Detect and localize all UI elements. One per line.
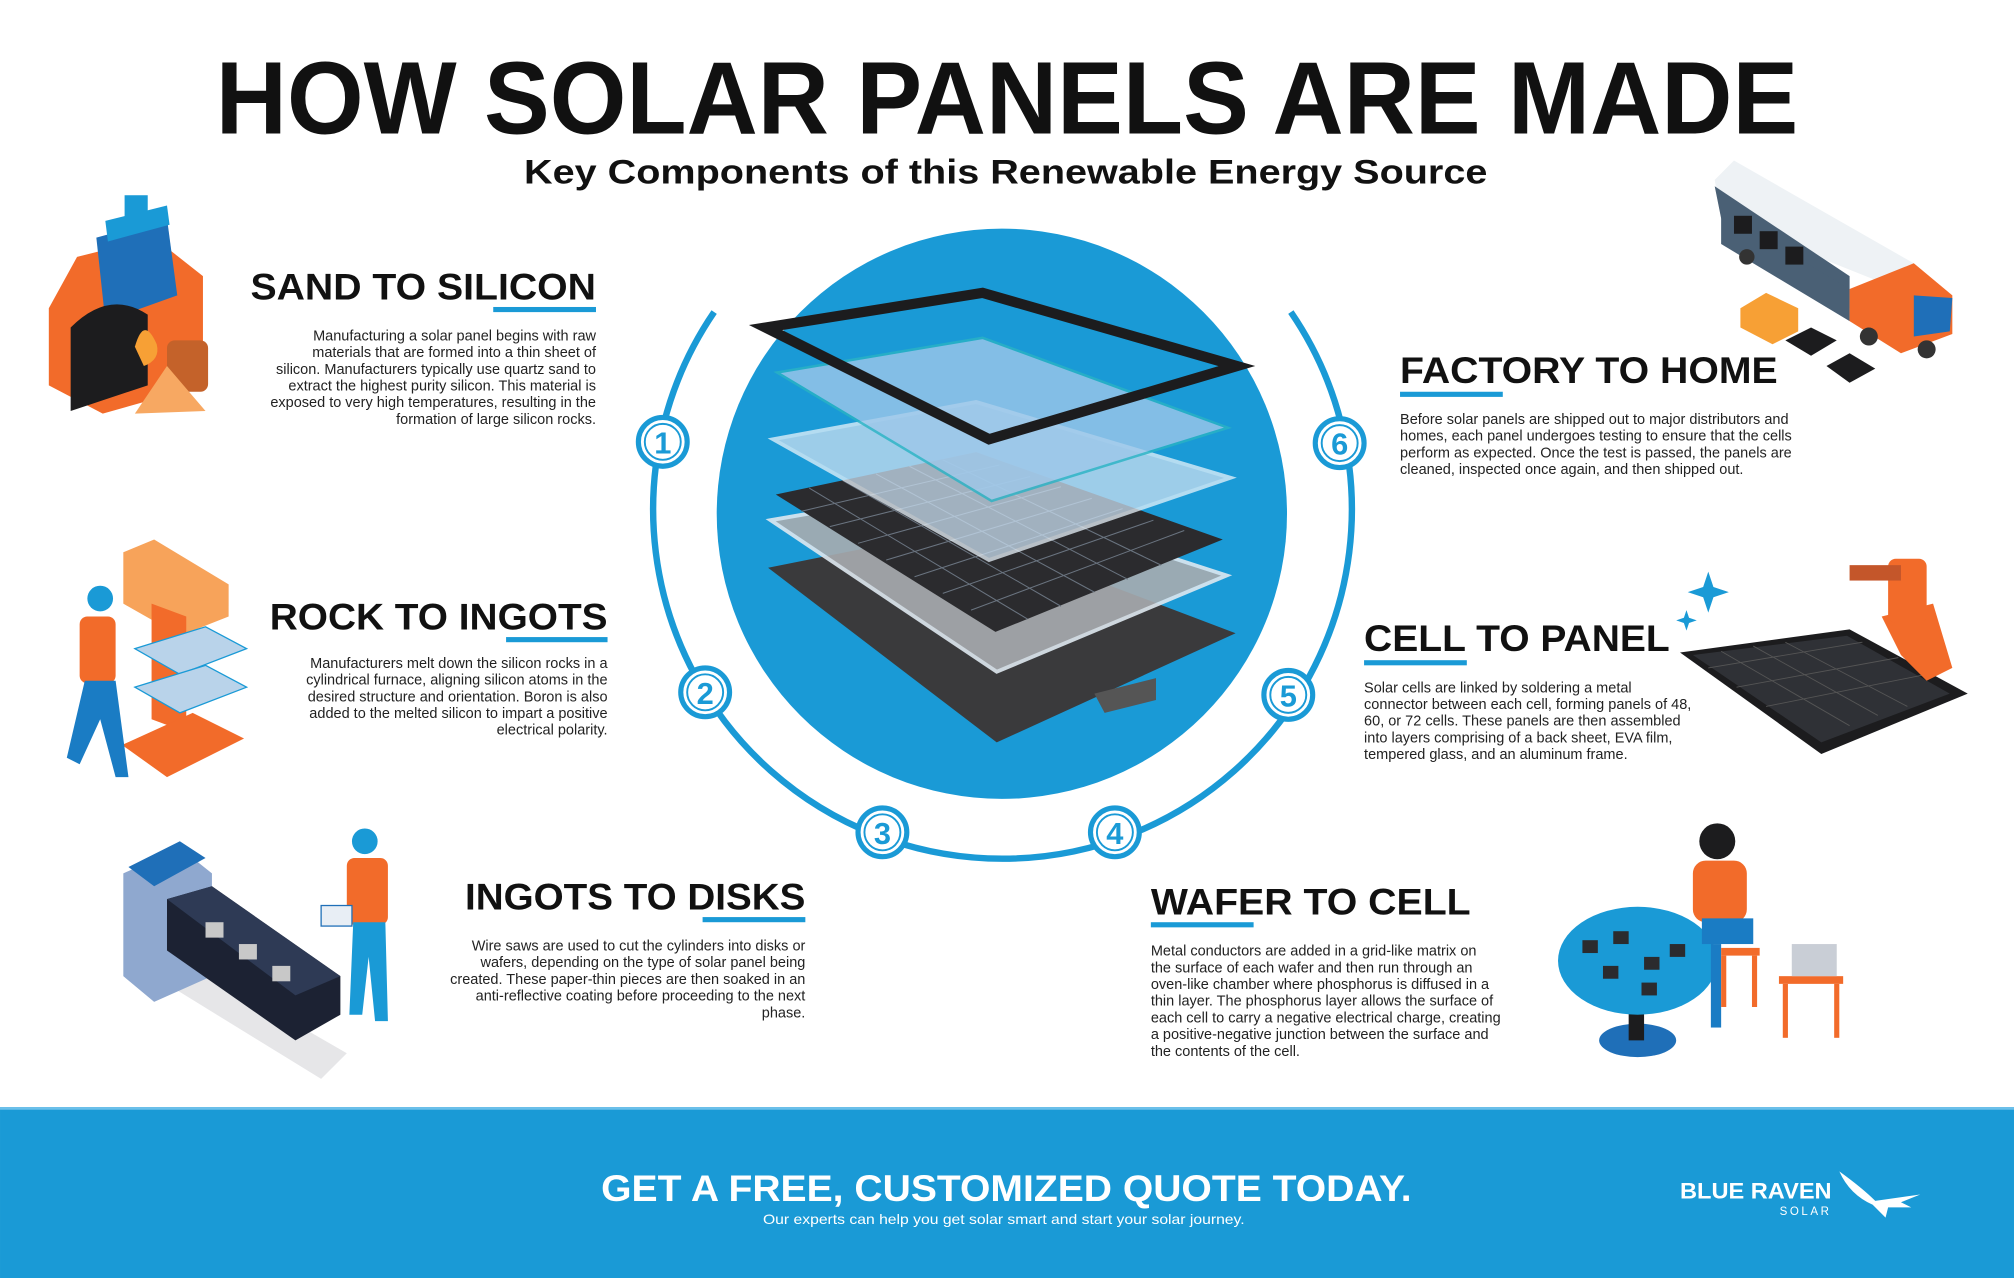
section 5: cell to panel: connector between each cell, forming panels of 48,	[1364, 697, 1691, 713]
section 5: cell to panel	[1364, 617, 1691, 763]
section 4: wafer to cell: oven-like chamber where phosphorus is diffused in a	[1151, 977, 1490, 993]
footer banner	[0, 1107, 2014, 1278]
section 2: rock to ingots: Manufacturers melt down the silicon rocks in a	[310, 656, 608, 672]
icon: woman at table	[1558, 823, 1843, 1057]
section 1: sand to silicon: materials that are formed into a thin sheet of	[312, 345, 597, 361]
section 3: ingots to disks: Wire saws are used to cut the cylinders into disks or	[472, 938, 806, 954]
step numbers: 4	[1106, 816, 1123, 851]
section 6: factory to home: perform as expected. Once the test is passed, the panels are	[1400, 445, 1792, 461]
section 6: factory to home: FACTORY TO HOME	[1400, 349, 1778, 391]
title: HOW SOLAR PANELS ARE MADE	[216, 41, 1798, 156]
section 4: wafer to cell: the contents of the cell.	[1151, 1044, 1300, 1060]
section 5: cell to panel: Solar cells are linked by soldering a metal	[1364, 680, 1632, 696]
section 6: factory to home: cleaned, inspected once again, and then shipped out.	[1400, 462, 1743, 478]
section 4: wafer to cell: Metal conductors are added in a grid-like matrix on	[1151, 944, 1476, 960]
section 4: wafer to cell: a positive-negative junction between the surface and	[1151, 1027, 1489, 1043]
EVA layer	[771, 488, 1227, 672]
step numbers: 1	[654, 425, 671, 460]
section 1: sand to silicon: extract the highest purity silicon. This material is	[288, 378, 596, 394]
section 3: ingots to disks: anti-reflective coating before proceeding to the next	[476, 989, 805, 1005]
section 4: wafer to cell: each cell to carry a negative electrical charge, creating	[1151, 1010, 1501, 1026]
section 6: factory to home: Before solar panels are shipped out to major distributors and	[1400, 412, 1789, 428]
section 1: sand to silicon	[250, 265, 597, 428]
section 6: factory to home: homes, each panel undergoes testing to ensure that the cells	[1400, 429, 1792, 445]
section 4: wafer to cell	[1151, 881, 1501, 1060]
back sheet	[768, 529, 1236, 742]
section 2: rock to ingots: desired structure and orientation. Boron is also	[308, 689, 608, 705]
section 2: rock to ingots	[270, 595, 608, 739]
arc ring	[653, 312, 1352, 859]
section 3: ingots to disks: wafers, depending on the type of solar panel being	[479, 955, 805, 971]
section 1: sand to silicon: Manufacturing a solar panel begins with raw	[313, 328, 597, 344]
section 5: cell to panel: tempered glass, and an aluminum frame.	[1364, 747, 1628, 763]
section 4: wafer to cell: WAFER TO CELL	[1151, 881, 1471, 923]
step numbers: 6	[1331, 427, 1348, 462]
section 5: cell to panel: CELL TO PANEL	[1364, 617, 1670, 659]
section 1: sand to silicon: SAND TO SILICON	[250, 265, 596, 307]
icon: furnace	[49, 195, 208, 414]
step numbers: 3	[874, 816, 891, 851]
icon: robot arm and panel	[1676, 559, 1968, 754]
central circle with exploded panel	[717, 229, 1287, 799]
section 1: sand to silicon: formation of large silicon rocks.	[396, 412, 596, 428]
section 5: cell to panel: 60, or 72 cells. These panels are then assembled	[1364, 714, 1681, 730]
section 2: rock to ingots: ROCK TO INGOTS	[270, 595, 608, 637]
section 5: cell to panel: into layers comprising of a back sheet, EVA film,	[1364, 730, 1672, 746]
section 3: ingots to disks: phase.	[762, 1005, 805, 1021]
section 2: rock to ingots: cylindrical furnace, aligning silicon atoms in the	[306, 673, 608, 689]
section 1: sand to silicon: exposed to very high temperatures, resulting in the	[270, 395, 596, 411]
section 4: wafer to cell: thin layer. The phosphorus layer allows the surface of	[1151, 994, 1494, 1010]
section 3: ingots to disks: created. These paper-thin pieces are then soaked in an	[450, 972, 805, 988]
call to action: GET A FREE, CUSTOMIZED QUOTE TODAY.	[601, 1167, 1412, 1209]
icon: ingot furnace and worker	[67, 539, 247, 777]
glass layer 2	[773, 402, 1230, 560]
section 1: sand to silicon: silicon. Manufacturers typically use quartz sand to	[276, 362, 596, 378]
cell layer	[776, 452, 1223, 632]
icon: conveyor machine and worker	[123, 828, 388, 1079]
section 2: rock to ingots: added to the melted silicon to impart a positive	[309, 706, 608, 722]
footer subtext: Our experts can help you get solar smart and start your solar journey.	[763, 1211, 1245, 1227]
section 6: factory to home	[1400, 349, 1792, 478]
section 3: ingots to disks: INGOTS TO DISKS	[465, 875, 805, 917]
logo: BLUE RAVEN	[1680, 1178, 1832, 1203]
section 3: ingots to disks	[450, 875, 806, 1021]
logo	[1680, 1171, 1920, 1218]
frame	[766, 293, 1237, 439]
logo: SOLAR	[1780, 1206, 1832, 1218]
section 2: rock to ingots: electrical polarity.	[497, 723, 608, 739]
icon: truck and forklift	[1715, 161, 1952, 383]
step numbers: 2	[697, 676, 714, 711]
step numbers	[638, 417, 1364, 857]
subtitle: Key Components of this Renewable Energy Source	[524, 154, 1487, 192]
section 4: wafer to cell: the surface of each wafer and then run through an	[1151, 960, 1472, 976]
glass layer 1	[777, 338, 1228, 501]
step numbers: 5	[1280, 678, 1297, 713]
